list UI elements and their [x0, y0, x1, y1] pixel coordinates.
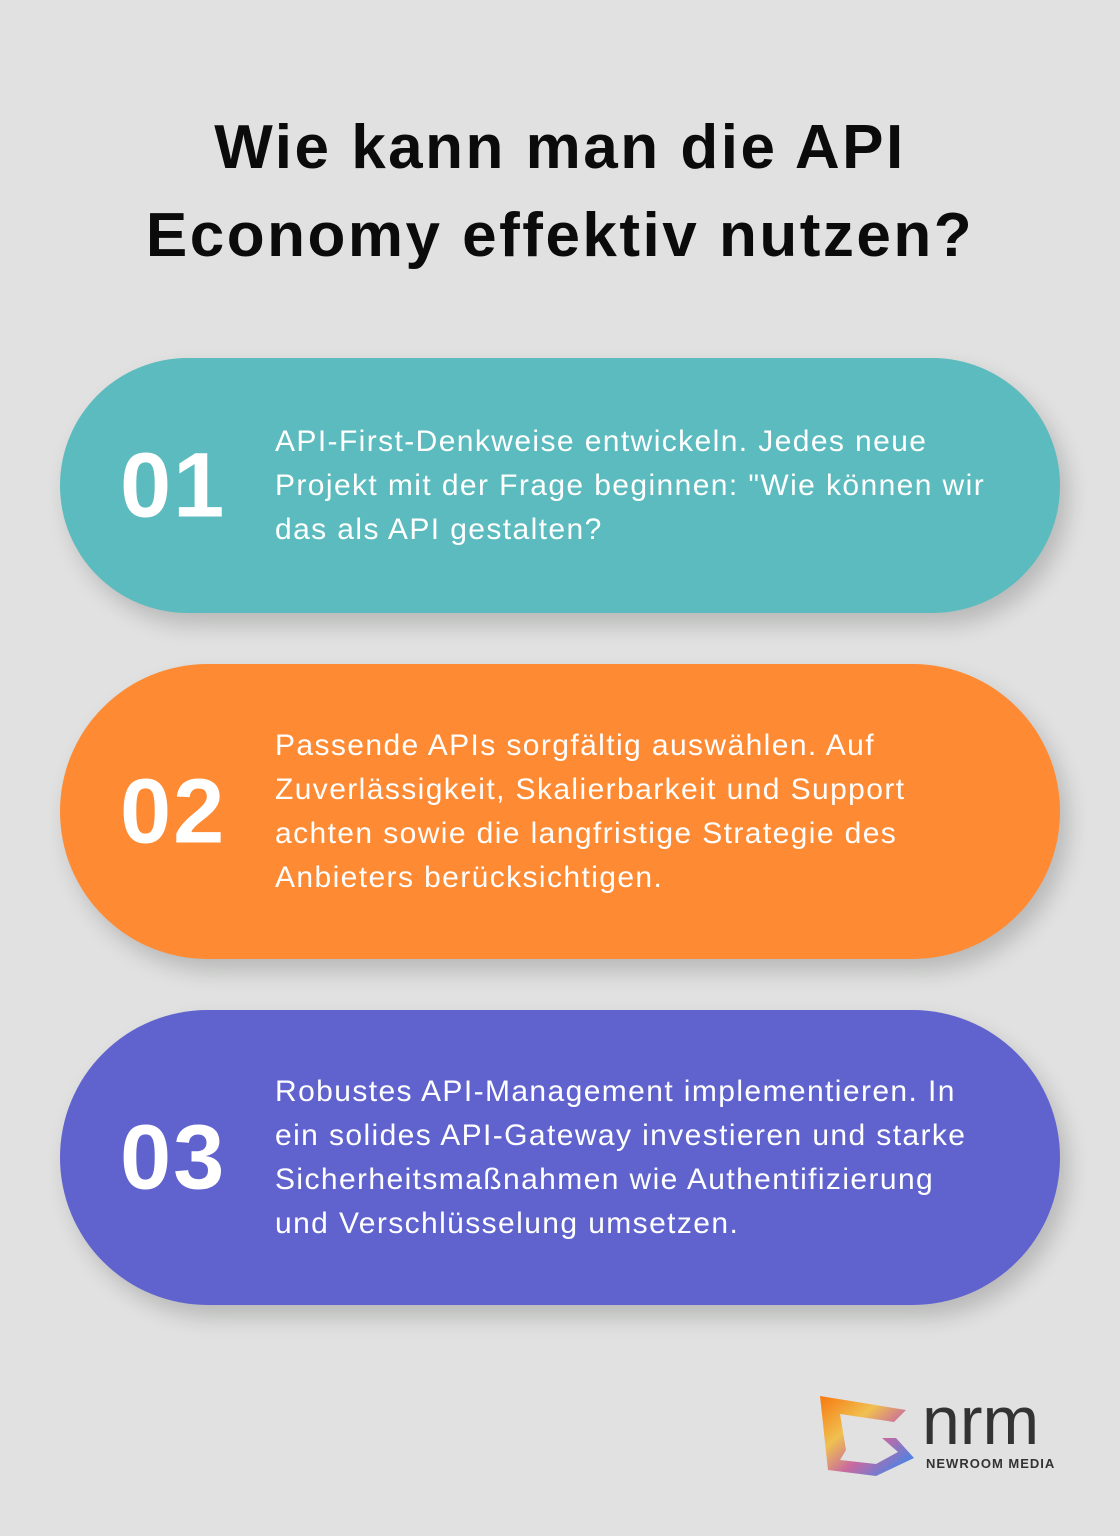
- title: Economy effektiv nutzen?: [146, 201, 974, 270]
- text 3: Robustes API-Management implementieren. In: [275, 1074, 956, 1108]
- text 2: [275, 728, 905, 894]
- text 2: Anbieters berücksichtigen.: [275, 860, 663, 894]
- icon: logo mark: [820, 1396, 914, 1476]
- number 01: 01: [120, 434, 226, 536]
- card 1: [60, 358, 1060, 613]
- brand text: nrm: [922, 1383, 1039, 1459]
- text 3: ein solides API-Gateway investieren und starke: [275, 1118, 966, 1152]
- text 2: achten sowie die langfristige Strategie des: [275, 816, 897, 850]
- title: Wie kann man die API: [214, 113, 906, 182]
- text 3: [275, 1074, 966, 1240]
- text 1: Projekt mit der Frage beginnen: "Wie können wir: [275, 468, 985, 502]
- text 3: Sicherheitsmaßnahmen wie Authentifizierung: [275, 1162, 934, 1196]
- number 03: 03: [120, 1106, 226, 1208]
- text 1: das als API gestalten?: [275, 512, 603, 546]
- card 3: [60, 1010, 1060, 1305]
- text 2: Passende APIs sorgfältig auswählen. Auf: [275, 728, 875, 762]
- text 1: API-First-Denkweise entwickeln. Jedes neue: [275, 424, 927, 458]
- text 1: [275, 424, 985, 546]
- logo: NEWROOM MEDIA: [926, 1456, 1055, 1471]
- title: [146, 113, 974, 270]
- text 3: und Verschlüsselung umsetzen.: [275, 1206, 739, 1240]
- text 2: Zuverlässigkeit, Skalierbarkeit und Support: [275, 772, 905, 806]
- card 2: [60, 664, 1060, 959]
- logo: [820, 1383, 1055, 1476]
- number 02: 02: [120, 760, 226, 862]
